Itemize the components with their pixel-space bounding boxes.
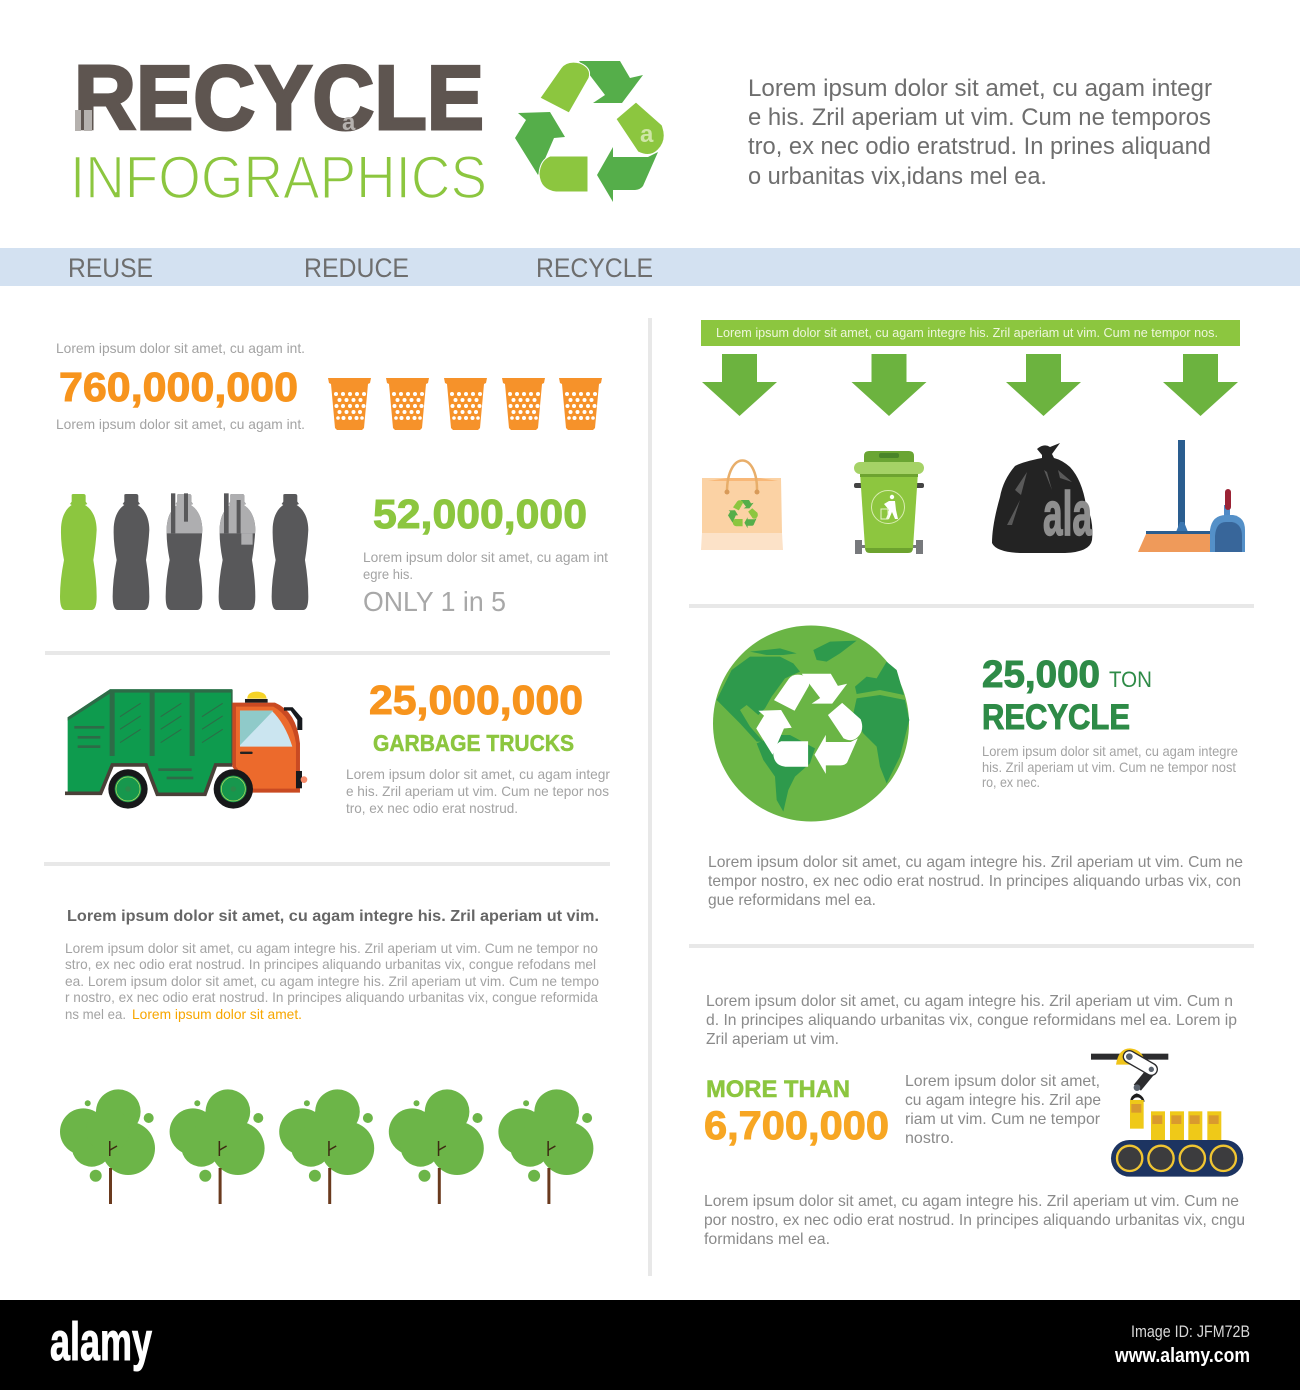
panel: 25,000 ton recycle stat bbox=[982, 654, 1238, 790]
panel: more than 6,700,000 stat bbox=[704, 1073, 1101, 1148]
text block: left article: stro, ex nec odio erat nostrud. In principes aliquando urbanitas vix, congue refodans mel bbox=[65, 956, 596, 972]
icons: waste baskets bbox=[328, 378, 602, 430]
intro text block: tro, ex nec odio eratstrud. In prines aliquand bbox=[748, 133, 1211, 160]
band: reuse reduce recycle: REDUCE bbox=[304, 253, 409, 283]
panel: 52,000,000 stat bbox=[363, 491, 608, 617]
text block: globe description bbox=[708, 854, 1243, 909]
panel: 25,000,000 garbage trucks stat: GARBAGE TRUCKS bbox=[373, 730, 574, 756]
icon: wheelie bin bbox=[854, 451, 924, 554]
icon: recycle logo: a bbox=[640, 121, 654, 148]
panel: 25,000 ton recycle stat: 25,000 bbox=[982, 654, 1100, 696]
icon: recycle logo bbox=[515, 61, 664, 202]
panel: 25,000,000 garbage trucks stat bbox=[346, 677, 610, 816]
text block: lower right intro bbox=[706, 993, 1237, 1048]
intro text block bbox=[748, 75, 1212, 190]
icon: garbage truck bbox=[65, 689, 307, 809]
panel: more than 6,700,000 stat: riam ut vim. Cum ne tempor bbox=[905, 1111, 1101, 1128]
text block: globe description: gue reformidans mel ea. bbox=[708, 892, 876, 909]
text block: lower right intro: Lorem ipsum dolor sit amet, cu agam integre his. Zril aperiam ut vim. Cum n bbox=[706, 993, 1233, 1010]
panel: 25,000,000 garbage trucks stat: e his. Zril aperiam ut vim. Cum ne tepor nos bbox=[346, 783, 609, 799]
icon: broom and dustpan bbox=[1138, 440, 1245, 552]
panel: 25,000 ton recycle stat: RECYCLE bbox=[982, 698, 1130, 737]
footer bar: alamy bbox=[50, 1312, 152, 1372]
intro text block: o urbanitas vix,idans mel ea. bbox=[748, 163, 1047, 190]
panel: more than 6,700,000 stat: cu agam integre his. Zril ape bbox=[905, 1092, 1101, 1109]
icon: globe with recycle symbol bbox=[713, 626, 909, 822]
panel: 25,000 ton recycle stat: his. Zril aperiam ut vim. Cum ne tempor nost bbox=[982, 759, 1236, 775]
banner: green caption: Lorem ipsum dolor sit amet, cu agam integre his. Zril aperiam ut vim. Cum ne tempor nos. bbox=[716, 325, 1218, 340]
text block: left article: r nostro, ex nec odio erat nostrud. In principes aliquando urbanitas vix, congue reformida bbox=[65, 989, 598, 1005]
title: a bbox=[342, 109, 356, 136]
panel: 52,000,000 stat: ONLY 1 in 5 bbox=[363, 586, 506, 617]
title bbox=[70, 48, 487, 211]
footer bar: Image ID: JFM72B bbox=[1131, 1322, 1250, 1341]
text block: left article: ns mel ea. bbox=[65, 1006, 126, 1022]
text block: left article: Lorem ipsum dolor sit amet. bbox=[132, 1006, 302, 1022]
text block: globe description: tempor nostro, ex nec odio erat nostrud. In principes aliquando urbas vix, con bbox=[708, 873, 1241, 890]
icon: shopping bag bbox=[701, 460, 783, 550]
icon: black trash bag bbox=[992, 443, 1092, 553]
icon: robot arm and conveyor bbox=[1091, 1048, 1243, 1177]
intro text block: Lorem ipsum dolor sit amet, cu agam integr bbox=[748, 75, 1212, 102]
panel: 760,000,000 stat bbox=[56, 340, 305, 432]
text block: globe description: Lorem ipsum dolor sit amet, cu agam integre his. Zril aperiam ut vim. Cum ne bbox=[708, 854, 1243, 871]
text block: closing paragraph bbox=[704, 1193, 1245, 1248]
panel: 52,000,000 stat: Lorem ipsum dolor sit amet, cu agam int bbox=[363, 549, 608, 565]
panel: 25,000,000 garbage trucks stat: 25,000,000 bbox=[369, 677, 583, 723]
band: reuse reduce recycle: RECYCLE bbox=[536, 253, 653, 283]
icon: black trash bag: ala bbox=[1043, 480, 1092, 549]
text block: closing paragraph: por nostro, ex nec odio erat nostrud. In principes aliquando urbanitas vix, cngu bbox=[704, 1212, 1245, 1229]
panel: more than 6,700,000 stat: nostro. bbox=[905, 1130, 954, 1147]
footer bar bbox=[0, 1300, 1300, 1390]
intro text block: e his. Zril aperiam ut vim. Cum ne temporos bbox=[748, 104, 1211, 131]
panel: 52,000,000 stat: 52,000,000 bbox=[373, 491, 587, 537]
panel: 25,000 ton recycle stat: TON bbox=[1109, 667, 1152, 692]
text block: lower right intro: Zril aperiam ut vim. bbox=[706, 1031, 839, 1048]
panel: 25,000,000 garbage trucks stat: tro, ex nec odio erat nostrud. bbox=[346, 800, 518, 816]
banner: green caption bbox=[701, 320, 1240, 346]
panel: 25,000,000 garbage trucks stat: Lorem ipsum dolor sit amet, cu agam integr bbox=[346, 766, 610, 782]
panel: 25,000 ton recycle stat: ro, ex nec. bbox=[982, 774, 1040, 790]
text block: lower right intro: d. In principes aliquando urbanitas vix, congue reformidans mel ea. Lorem ip bbox=[706, 1012, 1237, 1029]
panel: 52,000,000 stat: egre his. bbox=[363, 566, 413, 582]
icons: bottles bbox=[60, 493, 308, 610]
title: RECYCLE bbox=[74, 48, 484, 149]
band: reuse reduce recycle bbox=[0, 248, 1300, 286]
panel: more than 6,700,000 stat: MORE THAN bbox=[706, 1076, 850, 1103]
panel: 25,000 ton recycle stat: Lorem ipsum dolor sit amet, cu agam integre bbox=[982, 743, 1238, 759]
panel: 760,000,000 stat: 760,000,000 bbox=[59, 364, 298, 410]
panel: 760,000,000 stat: Lorem ipsum dolor sit amet, cu agam int. bbox=[56, 416, 305, 432]
band: reuse reduce recycle: REUSE bbox=[68, 253, 153, 283]
text block: left article: Lorem ipsum dolor sit amet, cu agam integre his. Zril aperiam ut vim. Cum ne tempor no bbox=[65, 940, 598, 956]
text block: left article: Lorem ipsum dolor sit amet, cu agam integre his. Zril aperiam ut vim. bbox=[67, 908, 599, 925]
text block: left article bbox=[65, 908, 599, 1022]
icons: trees bbox=[60, 1089, 593, 1204]
text block: left article: ea. Lorem ipsum dolor sit amet, cu agam integre his. Zril aperiam ut vim. Cum ne tempo bbox=[65, 973, 599, 989]
icons: down arrows bbox=[702, 354, 1238, 416]
panel: more than 6,700,000 stat: 6,700,000 bbox=[704, 1104, 889, 1148]
text block: closing paragraph: Lorem ipsum dolor sit amet, cu agam integre his. Zril aperiam ut vim. Cum ne bbox=[704, 1193, 1239, 1210]
panel: more than 6,700,000 stat: Lorem ipsum dolor sit amet, bbox=[905, 1073, 1100, 1090]
panel: 760,000,000 stat: Lorem ipsum dolor sit amet, cu agam int. bbox=[56, 340, 305, 356]
text block: closing paragraph: formidans mel ea. bbox=[704, 1231, 830, 1248]
footer bar: www.alamy.com bbox=[1114, 1345, 1250, 1367]
title: INFOGRAPHICS bbox=[70, 144, 487, 211]
